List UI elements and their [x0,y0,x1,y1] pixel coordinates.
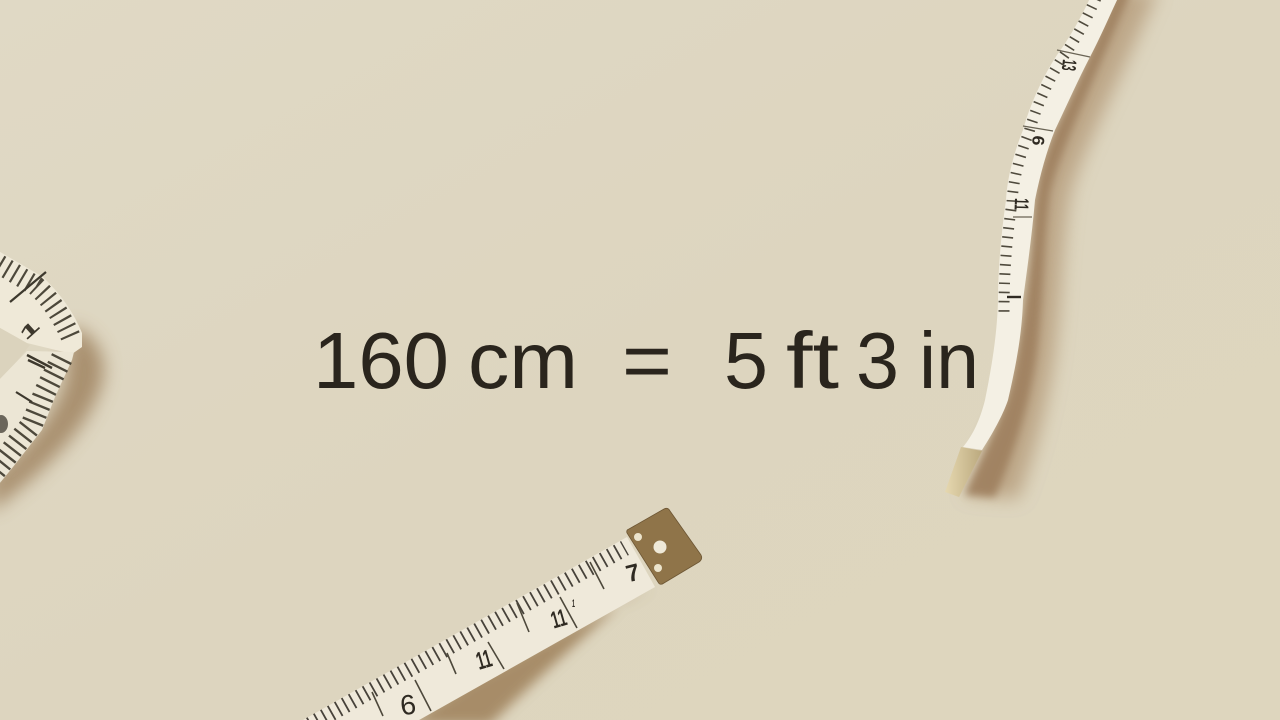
dark blob [0,415,8,433]
measuring tape: top right [945,0,1158,499]
inch mark: dark [1007,296,1021,298]
measuring tape: left loop [0,249,104,512]
lower strip ticks [0,358,62,482]
unit: ft: ft [786,316,839,405]
inch marks [1013,50,1090,217]
upper strip ticks [0,260,72,340]
half-inch marks [372,562,604,716]
long marks [10,272,46,402]
value: 5: 5 [724,316,768,405]
loop shadow [0,325,104,512]
tape strip [963,0,1118,450]
unit: in: in [919,316,979,405]
tab plate [627,508,702,584]
number mark [27,355,52,368]
tape shadow [405,588,655,720]
unit: cm: cm [468,316,578,405]
number: 11: 11 [473,645,495,676]
rivet [654,564,662,572]
lower strip [0,351,74,489]
number: 1: 1 [16,316,44,344]
measuring tape: bottom [296,508,702,720]
number: 13: 13 [1057,58,1080,72]
number: 7: 7 [623,559,643,588]
measuring tape: bottom: 1 [572,598,575,610]
upper strip [0,249,82,354]
metal end tab [627,508,702,584]
value: 160: 160 [313,316,449,405]
tape ticks [1004,0,1096,312]
tape ticks [303,548,625,720]
number: 11: 11 [1010,198,1032,211]
tape strip [296,537,655,720]
rivet [654,540,666,554]
number: 6: 6 [1028,135,1048,147]
brass end cap [945,447,982,497]
wide soft shadow [965,0,1158,499]
loop inner gap [0,326,30,382]
inch marks [415,597,577,711]
value: 3: 3 [856,316,899,405]
equals sign: = [622,316,672,405]
tight contact shadow [965,0,1132,497]
rivet [634,533,642,541]
number: 11: 11 [548,604,570,634]
conversion statement [313,316,979,405]
